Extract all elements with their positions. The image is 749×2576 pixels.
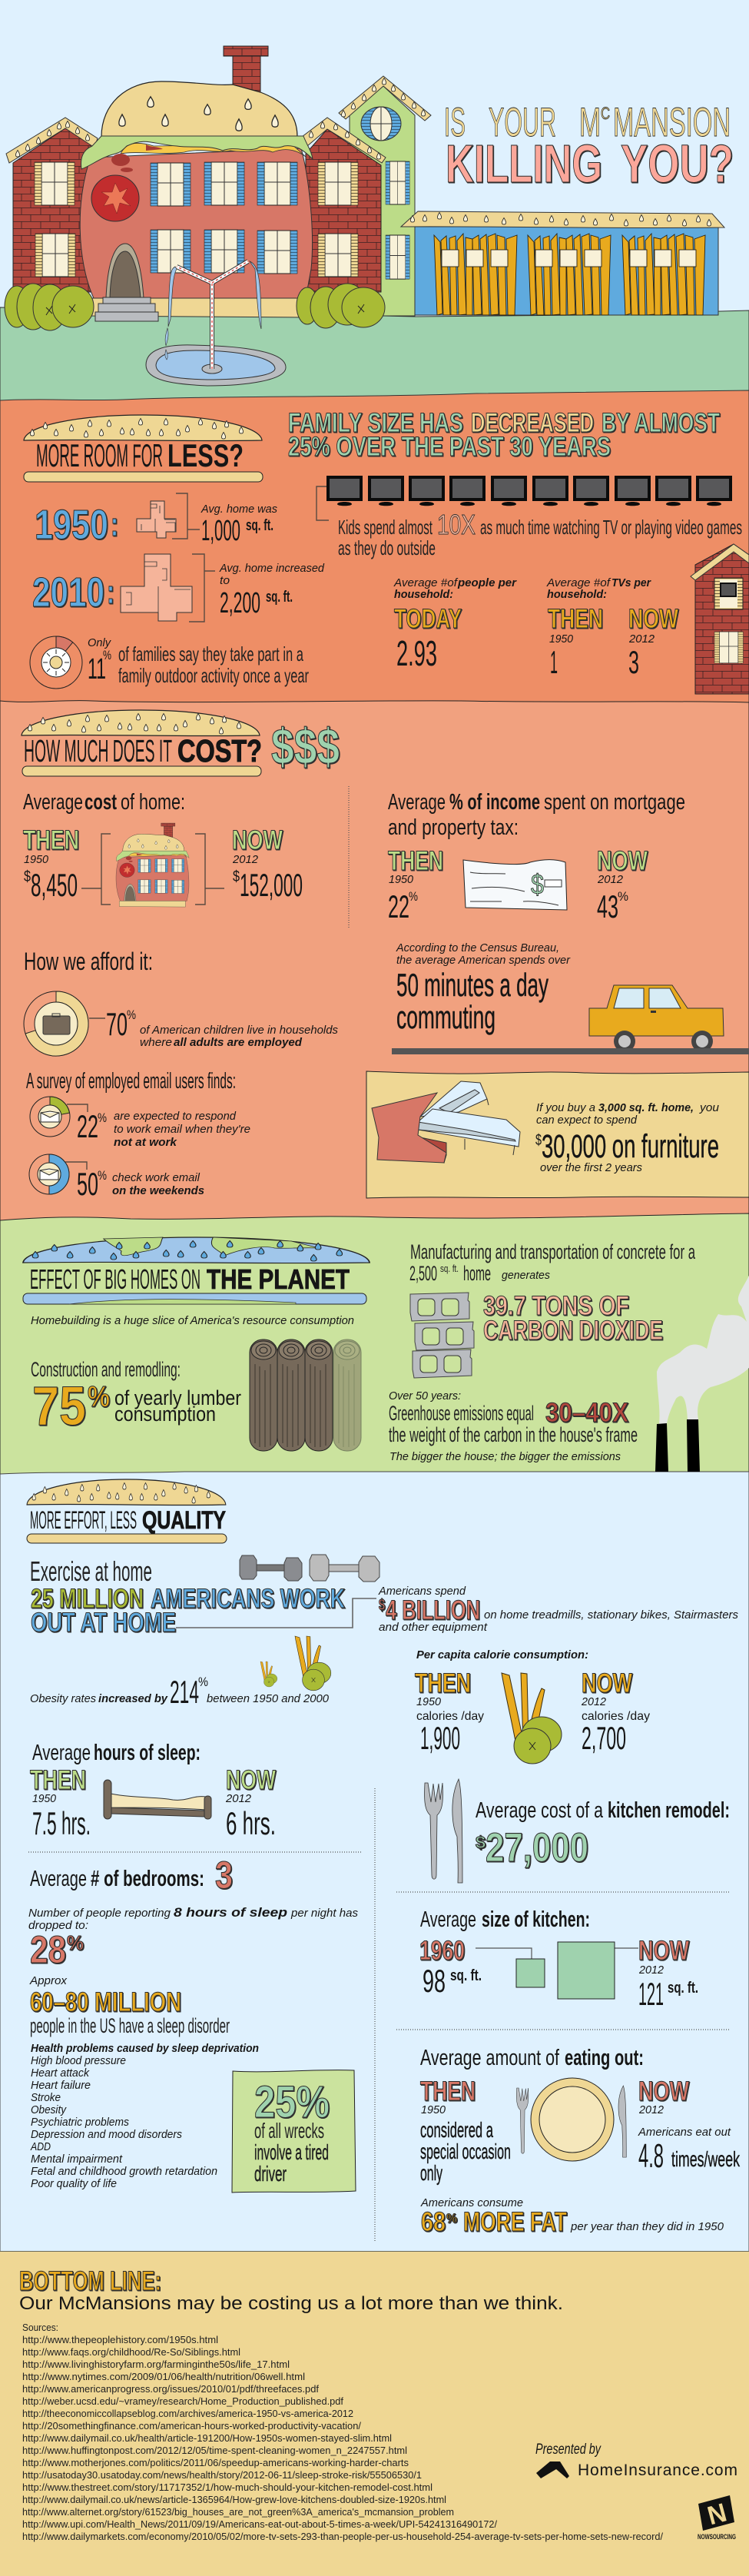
stat: sleep 28 percent: Number of people reporting	[28, 1907, 171, 1920]
stat: hours of sleep: Average	[32, 1741, 91, 1765]
stat: people per household	[393, 576, 517, 673]
stat: email survey: check work email	[112, 1171, 201, 1184]
stat: eating out: 2012	[638, 2103, 664, 2116]
stat: eating out: THEN	[420, 2076, 476, 2106]
headline: family size: FAMILY SIZE HAS	[288, 408, 463, 438]
list: sources: http://www.americanprogress.org/issues/2010/01/pdf/threefaces.pdf	[22, 2383, 319, 2395]
stat: percent of income: Average	[388, 790, 446, 815]
list: health problems: Mental impairment	[31, 2153, 123, 2166]
hero illustration: burger mansion	[5, 46, 724, 386]
stat: concrete carbon: 39.7 TONS OF	[483, 1291, 629, 1321]
stat: greenhouse emissions: 30–40X	[545, 1398, 629, 1428]
stat: people per household: 2.93	[396, 633, 437, 673]
logo: NowSourcing: N	[704, 2498, 730, 2531]
list: sources: http://www.thepeoplehistory.com/1950s.html	[22, 2334, 218, 2345]
stat: calories: 1950	[416, 1695, 442, 1708]
stat: bedrooms	[30, 1854, 233, 1897]
stat: hours of sleep: 7.5 hrs.	[32, 1805, 91, 1841]
list: sources: http://20somethingfinance.com/american-hours-worked-productivity-vacation/	[22, 2420, 361, 2432]
stat: percent of income: THEN	[388, 846, 443, 876]
text: conclusion: Our McMansions may be costing us a lot more than we think.	[19, 2293, 563, 2314]
stat: 2010 home: :	[107, 573, 114, 611]
stat: eating out: special occasion	[420, 2139, 511, 2163]
title: KILLING	[446, 134, 602, 194]
stat: email survey: %	[98, 1168, 107, 1183]
stat: exercise at home: and other equipment	[379, 1621, 488, 1634]
stat: email survey: 22	[77, 1108, 98, 1144]
stat: average cost of home: 1950	[24, 853, 49, 866]
garage	[401, 211, 724, 315]
list: sources: Sources:	[22, 2322, 58, 2333]
stat: sleep disorder: 60–80 MILLION	[30, 1987, 181, 2017]
heading: more room for less	[24, 415, 263, 482]
panel: more effort less quality	[27, 1479, 741, 2242]
icon: smokestacks	[655, 1276, 749, 1472]
logo: NowSourcing	[698, 2495, 736, 2541]
stat: calories: THEN	[415, 1668, 471, 1698]
text: kids tv time: 10X	[437, 509, 476, 540]
list: sources: http://www.faqs.org/childhood/Re-So/Siblings.html	[22, 2346, 240, 2358]
stat: calories: calories /day	[582, 1710, 650, 1723]
stat: kitchen size: NOW	[638, 1936, 689, 1966]
stat: 1950 home	[35, 493, 277, 548]
icon: check: $	[531, 868, 544, 900]
callout: tired drivers	[232, 2070, 356, 2193]
list: health problems: ADD	[30, 2140, 51, 2153]
list: sources: http://weber.ucsd.edu/~vramey/research/Home_Production_published.pdf	[22, 2395, 343, 2407]
stat: more fat: 68	[421, 2207, 446, 2237]
tower	[339, 76, 431, 316]
stat: more fat	[420, 2196, 724, 2237]
callout: tired drivers: driver	[254, 2162, 287, 2186]
stat: average cost of home: NOW	[232, 825, 283, 855]
list: sources: http://www.motherjones.com/politics/2011/06/speedup-americans-working-harder-charts	[22, 2457, 409, 2468]
stat: eating out: considered a	[420, 2118, 493, 2142]
stat: greenhouse emissions	[389, 1389, 638, 1463]
stat: percent of income: spent on mortgage	[544, 790, 685, 815]
stat: 11 percent outdoor activity: family outdoor activity once a year	[118, 664, 309, 687]
stat: calories: NOW	[582, 1668, 632, 1698]
stat: 11 percent outdoor activity: 11	[88, 653, 106, 685]
heading: more room for less: LESS?	[167, 437, 244, 473]
panel: furniture callout: 3,000 sq. ft. home,	[598, 1101, 694, 1114]
stat: calories: 1,900	[420, 1720, 460, 1756]
stat: percent of income: 2012	[597, 873, 624, 886]
stat: sleep 28 percent: dropped to:	[28, 1919, 88, 1932]
icon: plate with fork and knife	[516, 2078, 626, 2161]
stat: sleep disorder: Approx	[29, 1974, 68, 1987]
stat: TVs per household: 1	[550, 644, 558, 680]
panel: furniture callout: can expect to spend	[536, 1114, 638, 1127]
stat: average cost of home: THEN	[23, 825, 79, 855]
headline: family size	[288, 408, 720, 462]
bushes	[5, 284, 385, 330]
panel: furniture callout	[366, 1071, 749, 1198]
stat: sleep 28 percent	[28, 1905, 358, 1971]
title: M	[579, 100, 601, 145]
panel: more room for less	[24, 408, 749, 694]
stat: hours of sleep	[30, 1741, 276, 1841]
stat: kitchen size: 121	[638, 1976, 664, 2012]
stat: kitchen size: 98	[423, 1963, 446, 1999]
stat: kitchen remodel cost	[425, 1779, 730, 1883]
list: health problems: Depression and mood disorders	[31, 2128, 182, 2141]
stat: people per household: TODAY	[394, 604, 462, 634]
stat: hours of sleep: THEN	[30, 1765, 86, 1795]
stat: 1950 home: Avg. home was	[201, 503, 277, 516]
stat: exercise at home	[30, 1555, 738, 1638]
stat: obesity: increased by	[98, 1692, 168, 1705]
text: kids tv time: as they do outside	[338, 536, 436, 559]
stat: eating out: 4.8	[638, 2137, 664, 2175]
stat: kitchen size: 2012	[638, 1964, 664, 1977]
stat: TVs per household: 3	[628, 644, 639, 680]
stat: obesity	[30, 1636, 331, 1710]
stat: 70 percent children	[24, 991, 338, 1056]
stat: sleep 28 percent: 28	[30, 1928, 66, 1971]
stat: 1950 home: 1950	[35, 502, 108, 548]
stat: eating out: NOW	[638, 2076, 689, 2106]
panel: furniture callout: $	[535, 1132, 542, 1149]
stat: 70 percent children: where	[140, 1036, 172, 1049]
stat: email survey: not at work	[114, 1136, 177, 1149]
icon: check	[463, 860, 567, 910]
stat: 75 percent lumber	[31, 1358, 241, 1437]
stat: obesity: 214	[170, 1674, 199, 1710]
stat: commuting: commuting	[396, 999, 495, 1035]
panel: bottom line	[19, 2266, 737, 2542]
heading: effect of big homes on the planet	[23, 1237, 370, 1304]
stat: email survey: 50	[77, 1166, 98, 1202]
callout: tired drivers: of all wrecks	[254, 2119, 324, 2143]
list: sources: http://www.thestreet.com/story/11717352/1/how-much-should-your-kitchen-remodel-cost.html	[22, 2481, 432, 2493]
stat: sleep disorder	[29, 1974, 230, 2037]
stat: average cost of home: Average	[23, 790, 83, 815]
stat: eating out: only	[420, 2161, 442, 2185]
stat: more fat: MORE FAT	[463, 2207, 567, 2237]
stat: 11 percent outdoor activity: %	[103, 648, 111, 662]
heading: more effort less quality	[27, 1479, 227, 1543]
stat: 75 percent lumber: 75	[32, 1376, 86, 1437]
stat: greenhouse emissions: Greenhouse emissions equal	[389, 1402, 534, 1425]
stat: people per household: Average #of	[393, 576, 459, 589]
stat: average cost of home: $	[24, 868, 31, 885]
stat: exercise at home: Exercise at home	[30, 1555, 152, 1587]
stat: eating out: 1950	[421, 2103, 446, 2116]
list: sources: http://usatoday30.usatoday.com/news/health/story/2012-06-11/sleep-stroke-risk/55506530/1	[22, 2469, 422, 2481]
panel: how much does it cost	[22, 710, 749, 1202]
stat: commuting: the average American spends over	[396, 954, 571, 967]
text: kids tv time: Kids spend almost	[338, 516, 432, 539]
icon: couch	[372, 1081, 520, 1163]
stat: email survey: %	[98, 1110, 107, 1125]
stat: 70 percent children: 70	[106, 1006, 128, 1042]
stat: 70 percent children: %	[127, 1007, 136, 1022]
list: sources: http://www.nytimes.com/2009/01/06/health/nutrition/06well.html	[22, 2371, 305, 2382]
stat: email survey: A survey of employed email users finds:	[26, 1069, 236, 1094]
stat: concrete carbon: home	[463, 1262, 491, 1285]
stat: calories	[415, 1648, 650, 1764]
logo: HomeInsurance.com	[535, 2442, 737, 2479]
icon: bed	[104, 1780, 211, 1819]
icon: brick house with tv	[691, 544, 749, 694]
stat: percent of income: 1950	[389, 873, 414, 886]
stat: average cost of home: 8,450	[31, 867, 78, 903]
stat: percent of income: % of income	[449, 790, 540, 815]
text: kids tv time	[338, 509, 742, 559]
stat: percent of income: %	[409, 889, 418, 904]
stat: kitchen size	[419, 1907, 698, 2012]
stat: hours of sleep: 2012	[225, 1792, 252, 1805]
stat: 75 percent lumber: of yearly lumber	[114, 1386, 241, 1409]
stat: concrete carbon: sq. ft.	[440, 1263, 459, 1274]
stat: average cost of home: cost	[85, 790, 117, 815]
stat: 11 percent outdoor activity: Only	[88, 636, 111, 649]
stat: commuting: According to the Census Bureau,	[396, 941, 559, 954]
stat: sleep 28 percent: per night has	[290, 1907, 358, 1920]
fountain	[146, 261, 286, 386]
stat: email survey: to work email when they're	[114, 1123, 250, 1136]
stat: 2010 home	[32, 554, 325, 622]
title: IS	[444, 100, 466, 145]
stat: exercise at home: 4 BILLION	[386, 1595, 480, 1625]
heading: effect of big homes on the planet: THE PLANET	[207, 1263, 350, 1295]
stat: more fat: per year than they did in 1950	[570, 2220, 724, 2233]
heading: effect of big homes on the planet: EFFECT OF BIG HOMES ON	[30, 1263, 201, 1295]
stat: hours of sleep: 6 hrs.	[226, 1805, 276, 1841]
list: health problems: Obesity	[31, 2103, 67, 2116]
panel: furniture callout: you	[699, 1101, 720, 1114]
stat: kitchen remodel cost: Average cost of a	[476, 1798, 604, 1823]
stat: concrete carbon	[409, 1240, 696, 1378]
stat: email survey: are expected to respond	[114, 1110, 237, 1123]
stat: calories: calories /day	[416, 1710, 484, 1723]
logo: HomeInsurance.com: HomeInsurance.com	[578, 2461, 737, 2479]
stat: kitchen size: size of kitchen:	[482, 1907, 590, 1932]
stat: TVs per household: THEN	[548, 604, 603, 634]
stat: calories: 2012	[581, 1695, 607, 1708]
list: sources: http://www.livinghistoryfarm.org/farminginthe50s/life_17.html	[22, 2359, 290, 2370]
heading: more room for less: MORE ROOM FOR	[36, 437, 163, 473]
stat: 2010 home: to	[220, 574, 230, 587]
stat: kitchen size: 1960	[419, 1936, 465, 1966]
stat: percent of income: 22	[388, 888, 409, 925]
stat: TVs per household: NOW	[628, 604, 678, 634]
headline: family size: 25% OVER THE PAST 30 YEARS	[288, 432, 611, 462]
stat: TVs per household: TVs per	[611, 576, 651, 589]
stat: kitchen size: sq. ft.	[450, 1967, 482, 1984]
televisions row	[317, 476, 732, 520]
list: sources: http://theeconomiccollapseblog.com/archives/america-1950-vs-america-2012	[22, 2408, 353, 2419]
list: sources	[22, 2322, 663, 2542]
stat: percent of income: NOW	[597, 846, 648, 876]
stat: kitchen size: Average	[420, 1907, 476, 1932]
heading: more effort less quality: QUALITY	[142, 1506, 226, 1534]
stat: concrete carbon: 2,500	[409, 1262, 437, 1285]
callout: tired drivers: 25%	[254, 2077, 330, 2127]
stat: hours of sleep: NOW	[226, 1765, 276, 1795]
stat: bedrooms: Average	[30, 1867, 87, 1891]
brick wings	[6, 118, 386, 292]
list: health problems: Health problems caused by sleep deprivation	[31, 2042, 259, 2055]
list: health problems: Stroke	[31, 2091, 61, 2104]
stat: average cost of home: 2012	[232, 853, 259, 866]
stat: TVs per household: Average #of	[546, 576, 611, 589]
stat: percent of income: 43	[597, 888, 618, 925]
list: health problems: High blood pressure	[31, 2054, 126, 2067]
stat: exercise at home: AMERICANS WORK	[151, 1584, 345, 1614]
list: sources: http://www.alternet.org/story/61523/big_houses_are_not_green%3A_america's_mcmansion_problem	[22, 2506, 454, 2518]
stat: 1950 home: :	[111, 506, 118, 543]
heading: how much does it cost: $$$	[271, 718, 340, 775]
stat: greenhouse emissions: Over 50 years:	[389, 1389, 461, 1403]
heading: how much does it cost	[22, 710, 340, 776]
list: health problems: Heart failure	[31, 2079, 91, 2092]
stat: hours of sleep: hours of sleep:	[94, 1741, 201, 1765]
stat: concrete carbon: generates	[502, 1269, 550, 1282]
panel: effect on the planet	[23, 1237, 749, 1472]
list: health problems: Poor quality of life	[31, 2177, 117, 2190]
stat: TVs per household: 1950	[549, 632, 574, 646]
stat: 2010 home: 2010	[32, 569, 104, 616]
list: sources: http://www.dailymail.co.uk/health/article-191200/How-1950s-women-stayed-slim.html	[22, 2432, 392, 2444]
stat: sleep 28 percent: 8 hours of sleep	[174, 1905, 287, 1920]
stat: people per household: people per	[457, 576, 517, 589]
stat: email survey	[26, 1069, 250, 1202]
stat: concrete carbon: CARBON DIOXIDE	[483, 1316, 663, 1346]
stat: kitchen remodel cost: $	[476, 1833, 486, 1852]
icon: logs	[250, 1339, 361, 1451]
stat: TVs per household: household:	[547, 588, 607, 601]
icon: car	[589, 985, 724, 1052]
stat: calories: Per capita calorie consumption:	[416, 1648, 588, 1661]
stat: exercise at home: $	[379, 1597, 385, 1614]
stat: 70 percent children: all adults are employed	[174, 1036, 303, 1049]
stat: kitchen size: sq. ft.	[668, 1980, 698, 1997]
list: health problems: Heart attack	[31, 2066, 90, 2080]
stat: exercise at home: OUT AT HOME	[31, 1608, 176, 1638]
stat: 75 percent lumber: Construction and remodling:	[31, 1358, 181, 1381]
list: health problems: Fetal and childhood growth retardation	[31, 2165, 217, 2178]
text: homebuilding: Homebuilding is a huge slice of America's resource consumption	[31, 1314, 354, 1327]
list: health problems	[30, 2042, 259, 2190]
stat: people per household: household:	[394, 588, 453, 601]
stat: 2010 home: Avg. home increased	[219, 562, 325, 575]
stat: eating out	[420, 2046, 741, 2185]
heading: how we afford it: How we afford it:	[24, 948, 153, 975]
stat: average cost of home: of home:	[121, 790, 185, 815]
icon: mini burger house	[116, 823, 189, 907]
stat: 2010 home: 2,200	[220, 587, 260, 619]
stat: percent of income	[388, 790, 685, 925]
main building	[80, 46, 313, 317]
stat: commuting: 50 minutes a day	[396, 967, 548, 1003]
stat: exercise at home: on home treadmills, stationary bikes, Stairmasters	[484, 1608, 738, 1622]
list: sources: http://www.huffingtonpost.com/2012/12/05/time-spent-cleaning-women_n_2247557.html	[22, 2445, 407, 2456]
stat: obesity: Obesity rates	[30, 1692, 96, 1705]
stat: bedrooms: 3	[215, 1854, 233, 1897]
stat: bedrooms: # of bedrooms:	[91, 1867, 204, 1891]
front steps	[95, 297, 158, 321]
stat: 11 percent outdoor activity: of families say they take part in a	[118, 642, 303, 666]
stat: average cost of home: $	[233, 868, 240, 885]
stat: average cost of home	[23, 790, 303, 907]
heading: more effort less quality: MORE EFFORT, LESS	[30, 1506, 137, 1534]
stat: sleep disorder: people in the US have a sleep disorder	[30, 2014, 230, 2037]
stat: calories: 2,700	[582, 1720, 626, 1756]
logo: HomeInsurance.com: Presented by	[535, 2442, 602, 2458]
stat: eating out: Americans eat out	[638, 2126, 731, 2139]
stat: average cost of home: 152,000	[240, 867, 303, 903]
stat: obesity: %	[198, 1675, 208, 1689]
panel: furniture callout: over the first 2 years	[540, 1161, 642, 1174]
list: sources: http://www.dailymail.co.uk/news/article-1365964/How-grew-love-kitchens-doubled-size-1920s.html	[22, 2494, 446, 2505]
stat: eating out: Average amount of	[420, 2046, 560, 2070]
stat: more fat: %	[446, 2211, 457, 2226]
stat: hours of sleep: 1950	[32, 1792, 57, 1805]
list: health problems: Psychiatric problems	[31, 2116, 129, 2129]
stat: TVs per household	[546, 576, 678, 680]
stat: eating out: eating out:	[565, 2046, 644, 2070]
heading: how much does it cost: COST?	[177, 733, 262, 768]
stat: 11 percent outdoor activity	[30, 636, 309, 689]
stat: 2010 home: sq. ft.	[266, 589, 293, 606]
stat: more fat: Americans consume	[420, 2196, 523, 2209]
headline: family size: DECREASED	[471, 408, 594, 438]
title: YOUR	[489, 100, 556, 145]
stat: exercise at home: Americans spend	[378, 1585, 466, 1598]
list: sources: http://www.dailymarkets.com/economy/2010/05/02/more-tv-sets-293-than-people-per-us-household-254-average-tv-sets-per-home-sets-new-record/	[22, 2531, 663, 2542]
stat: exercise at home: 25 MILLION	[31, 1584, 144, 1614]
heading: bottom line: BOTTOM LINE:	[19, 2266, 161, 2296]
panel: furniture callout: If you buy a	[536, 1101, 595, 1114]
stat: TVs per household: 2012	[628, 632, 655, 646]
stat: commuting	[392, 941, 749, 1054]
stat: 1950 home: sq. ft.	[246, 517, 273, 534]
stat: kitchen remodel cost: 27,000	[486, 1825, 588, 1871]
stat: obesity: between 1950 and 2000	[207, 1692, 330, 1705]
stat: sleep 28 percent: %	[67, 1931, 84, 1954]
stat: 70 percent children: of American children live in households	[140, 1024, 338, 1037]
list: sources: http://www.upi.com/Health_News/2011/09/19/Americans-eat-out-about-5-times-a-week/UPI-54241316490172/	[22, 2518, 497, 2530]
stat: email survey: on the weekends	[112, 1184, 204, 1197]
callout: tired drivers: involve a tired	[254, 2140, 329, 2164]
stat: 75 percent lumber: %	[88, 1381, 110, 1413]
icon: dumbbells	[240, 1555, 379, 1582]
heading: how much does it cost: HOW MUCH DOES IT	[24, 733, 172, 768]
stat: 75 percent lumber: consumption	[114, 1403, 216, 1426]
stat: percent of income: and property tax:	[388, 815, 519, 840]
stat: 1950 home: 1,000	[201, 515, 240, 547]
stat: greenhouse emissions: The bigger the house; the bigger the emissions	[389, 1450, 621, 1463]
title: C	[601, 104, 610, 123]
stat: percent of income: %	[618, 889, 628, 904]
title	[444, 100, 734, 194]
